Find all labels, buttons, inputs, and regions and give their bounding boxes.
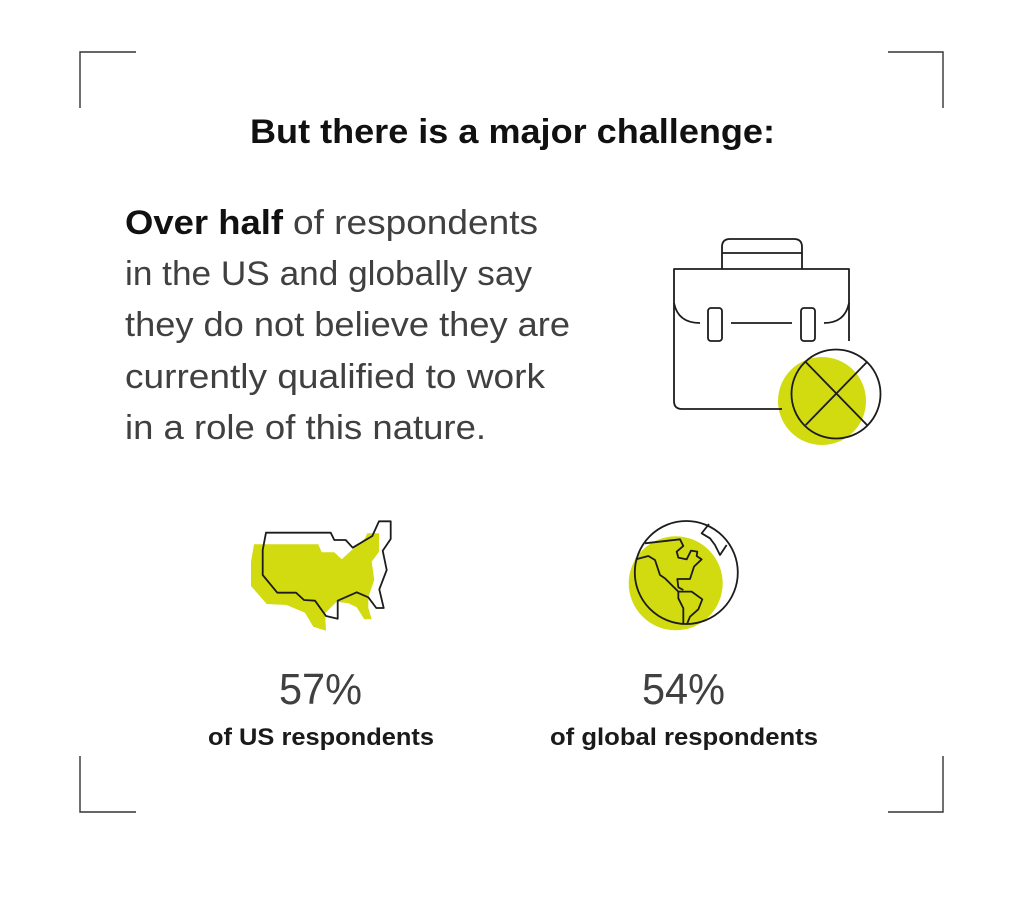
text block: over half of respondents: of respondents <box>293 204 538 242</box>
stat: US respondents: of US respondents <box>208 724 434 751</box>
corner frame brackets <box>80 52 943 812</box>
icon: briefcase with cross <box>674 239 880 445</box>
stat: US respondents <box>208 665 434 751</box>
icon: globe <box>629 521 738 630</box>
stat: US respondents: 57% <box>279 665 362 714</box>
text block: over half of respondents: in the US and globally say <box>125 255 532 293</box>
text block: over half of respondents: in a role of this nature. <box>125 409 486 447</box>
stat: global respondents: of global respondents <box>550 724 818 751</box>
text block: over half of respondents: Over half <box>125 204 284 242</box>
text block: over half of respondents <box>125 204 570 447</box>
stat: global respondents: 54% <box>642 665 725 714</box>
icon: US map <box>251 521 391 631</box>
stat: global respondents <box>550 665 818 751</box>
text block: over half of respondents: they do not believe they are <box>125 306 570 344</box>
title: But there is a major challenge: <box>250 113 775 151</box>
text block: over half of respondents: currently qualified to work <box>125 358 546 396</box>
